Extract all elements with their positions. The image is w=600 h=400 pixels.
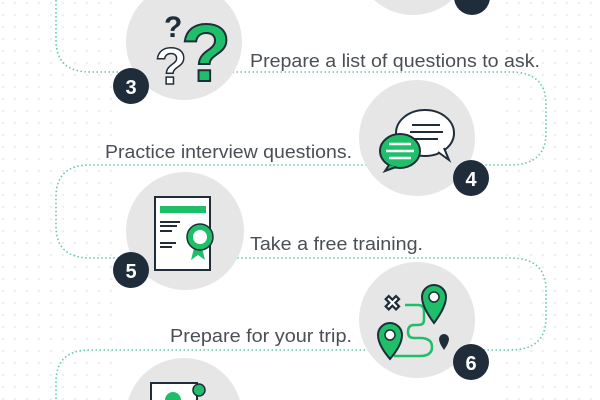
icon: certificate bbox=[155, 197, 213, 270]
badge 3: 3 bbox=[125, 77, 137, 99]
icon: map pins: ✖ bbox=[384, 293, 401, 315]
badge 6 bbox=[453, 344, 489, 380]
text 4: Practice interview questions. bbox=[105, 142, 352, 162]
badge 5: 5 bbox=[125, 261, 137, 283]
step 4 bbox=[105, 80, 489, 196]
badge 4 bbox=[453, 160, 489, 196]
step 3 bbox=[113, 0, 540, 104]
icon: chat bubbles bbox=[380, 110, 454, 171]
step 5 bbox=[113, 172, 423, 290]
icon: question marks: ? bbox=[155, 38, 187, 96]
icon: question marks bbox=[155, 8, 231, 99]
text 3: Prepare a list of questions to ask. bbox=[250, 51, 540, 71]
badge 6: 6 bbox=[465, 353, 477, 375]
badge 3 bbox=[113, 68, 149, 104]
icon: map pins bbox=[378, 285, 449, 359]
step 2 (partial) bbox=[355, 0, 490, 15]
step 6 bbox=[170, 262, 489, 380]
icon: question marks: ? bbox=[181, 8, 231, 99]
text 5: Take a free training. bbox=[250, 234, 423, 254]
text 6: Prepare for your trip. bbox=[170, 326, 352, 346]
badge 4: 4 bbox=[465, 169, 477, 191]
step 7 (partial) bbox=[126, 358, 242, 400]
icon: question marks: ? bbox=[164, 11, 182, 44]
badge 5 bbox=[113, 252, 149, 288]
